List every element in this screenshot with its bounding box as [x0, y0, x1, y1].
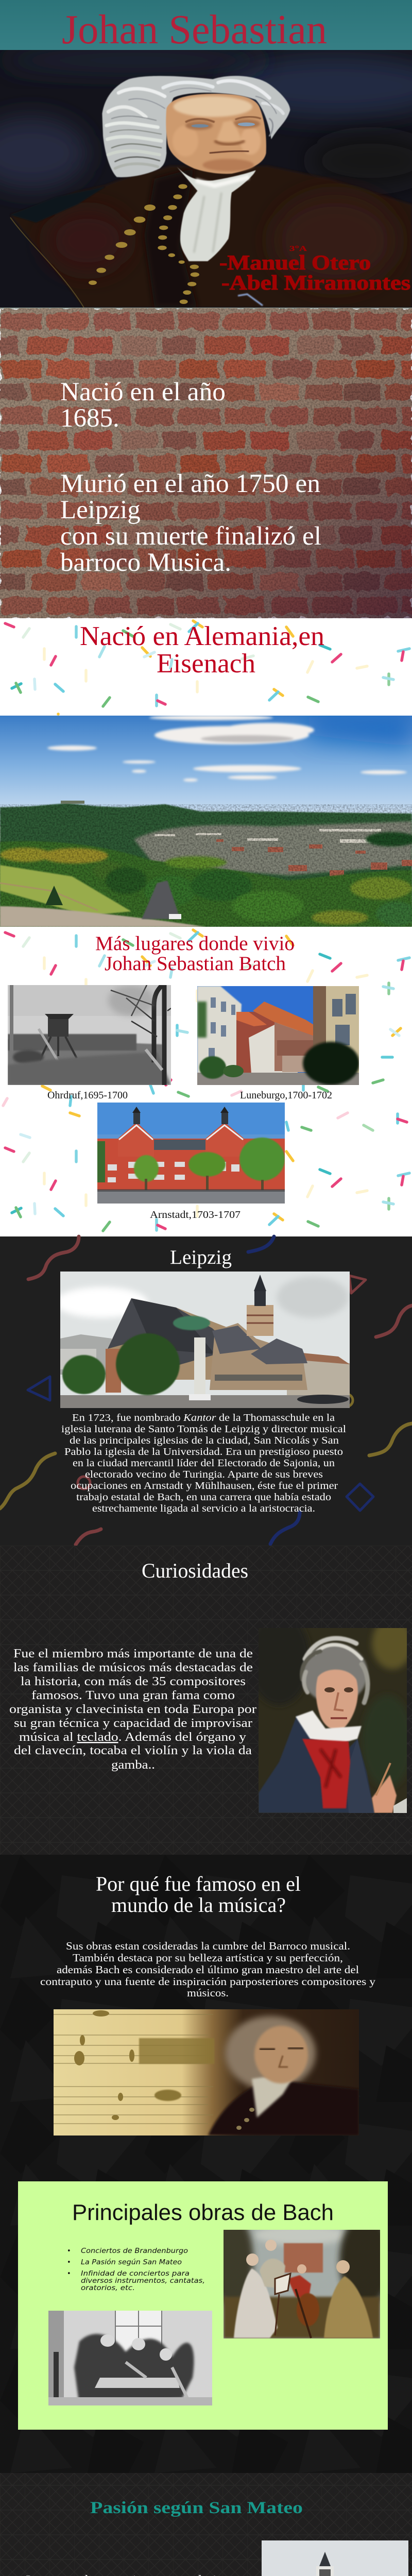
- heading: St Matthew Passion teal: Pasión según San Mateo: [90, 2499, 303, 2517]
- heading: birthplace: Eisenach: [157, 649, 255, 679]
- panel: portrait of Bach: [0, 50, 412, 308]
- text: why famous body: [40, 1940, 376, 1999]
- text: Leipzig description: electorado vecino de Turingia. Aparte de sus breves: [85, 1469, 323, 1480]
- text: Leipzig description: Pablo la iglesia de la Universidad. Era un prestigioso puesto: [64, 1446, 343, 1458]
- text: class and authors: 3°A: [289, 245, 307, 253]
- heading: other places: [95, 933, 295, 975]
- panel: white confetti background: [0, 618, 412, 1239]
- captions: Ohrdruf and Luneburgo: Ohrdruf,1695-1700: [47, 1090, 128, 1101]
- text: class and authors: -Manuel Otero: [219, 251, 371, 274]
- text: why famous body: También destaca por su belleza artística y su perfección,: [73, 1952, 343, 1964]
- image: Eisenach landscape: [0, 716, 412, 927]
- text: Curiosidades body: famosos. Tuvo una gran fama como: [31, 1689, 235, 1702]
- image: St Thomas church: [262, 2540, 408, 2576]
- image: family music painting: [224, 2230, 380, 2338]
- heading: why famous: mundo de la música?: [111, 1893, 286, 1917]
- list: works: La Pasión según San Mateo: [81, 2259, 182, 2266]
- face: [166, 94, 266, 174]
- heading: Leipzig: Leipzig: [170, 1246, 232, 1268]
- heading: other places: Más lugares donde vivio: [95, 933, 295, 955]
- text: birth: [60, 378, 226, 433]
- list: works: •: [67, 2247, 71, 2255]
- text: Curiosidades body: música al teclado . Además del órgano y: [19, 1731, 246, 1744]
- text: why famous body: músicos.: [187, 1987, 229, 1999]
- list: works: •: [67, 2270, 71, 2278]
- text: Curiosidades body: las familias de músicos más destacadas de: [13, 1661, 253, 1674]
- image: Arnstadt: [97, 1103, 285, 1204]
- text: Leipzig description: de las principales iglesias de la ciudad, San Nicolás y San: [70, 1435, 339, 1446]
- text: death: Murió en el año 1750 en: [60, 469, 320, 498]
- panel: brick wall: [0, 308, 412, 618]
- text: why famous body: contraputo y una fuente de inspiración parposteriores compositores y: [40, 1975, 376, 1988]
- text: Curiosidades body: su gran técnica y capacidad de improvisar: [14, 1717, 252, 1730]
- image: composer portrait: [259, 1628, 407, 1813]
- wig: [102, 76, 290, 177]
- list: works: Conciertos de Brandenburgo: [81, 2247, 188, 2255]
- text: death: con su muerte finalizó el: [60, 522, 321, 551]
- panel: why famous background: [0, 1855, 412, 2473]
- captions: Ohrdruf and Luneburgo: Luneburgo,1700-1702: [240, 1090, 332, 1101]
- list: works: [67, 2247, 205, 2292]
- heading: why famous: Por qué fue famoso en el: [96, 1872, 301, 1895]
- text: Curiosidades body: Fue el miembro más importante de una de: [13, 1647, 253, 1660]
- text: class and authors: [219, 245, 410, 294]
- caption: Arnstadt: Arnstadt,1703-1707: [150, 1209, 241, 1221]
- text: Curiosidades body: gamba..: [111, 1758, 155, 1772]
- image: Luneburgo: [197, 986, 359, 1085]
- heading: birthplace: [80, 621, 324, 679]
- panel: Leipzig background: [0, 1236, 412, 1546]
- heading: other places: Johan Sebastian Batch: [105, 953, 286, 975]
- text: birth: Nació en el año: [60, 378, 226, 406]
- text: Leipzig description: trabajo estatal de Bach, en una carrera que había estado: [76, 1492, 331, 1503]
- text: death: [60, 469, 321, 577]
- title: Johan Sebastian: [62, 7, 327, 53]
- heading: principal works: Principales obras de Bach: [72, 2200, 334, 2225]
- heading: Curiosidades: Curiosidades: [142, 1559, 248, 1582]
- list: works: diversos instrumentos, cantatas,: [81, 2277, 205, 2285]
- panel: Curiosidades background: [0, 1546, 412, 1855]
- text: Curiosidades body: organista y clavecinista en toda Europa por: [9, 1703, 256, 1716]
- buttons: [89, 184, 199, 304]
- text: Leipzig description: estrechamente ligada al servicio a la aristocracia.: [92, 1503, 315, 1514]
- text: Leipzig description: [61, 1412, 346, 1514]
- text: Leipzig description: En 1723, fue nombrado Kantor de la Thomasschule en la: [72, 1412, 335, 1423]
- list: works: Infinidad de conciertos para: [81, 2270, 190, 2278]
- text: Curiosidades body: la historia, con más de 35 compositores: [21, 1675, 246, 1688]
- text: class and authors: -Abel Miramontes: [221, 271, 410, 294]
- image: Leipzig church: [60, 1272, 350, 1408]
- text: why famous body: Sus obras estan cosideradas la cumbre del Barroco musical.: [66, 1940, 350, 1952]
- list: works: oratorios, etc.: [81, 2284, 135, 2292]
- text: Leipzig description: en la ciudad mercantil líder del Electorado de Sajonia, un: [73, 1458, 335, 1469]
- image: Ohrdruf: [8, 985, 171, 1085]
- text: why famous body: además Bach es considerado el último gran maestro del arte del: [57, 1963, 359, 1976]
- heading: why famous: [96, 1872, 301, 1917]
- text: Curiosidades body: [9, 1647, 256, 1772]
- list: works: •: [67, 2259, 71, 2266]
- text: Leipzig description: iglesia luterana de Santo Tomás de Leipzig y director musical: [61, 1423, 346, 1435]
- text: birth: 1685.: [60, 404, 119, 433]
- panel: principal works: [18, 2181, 391, 2430]
- image: score and Bach portrait: [54, 2009, 359, 2136]
- heading: birthplace: Nació en Alemania,en: [80, 621, 324, 651]
- text: Leipzig description: ocupaciones en Arnstadt y Mühlhausen, éste fue el primer: [71, 1480, 338, 1492]
- cravat: [177, 167, 256, 261]
- title band: [0, 0, 412, 53]
- captions: Ohrdruf and Luneburgo: [47, 1090, 332, 1101]
- text: death: barroco Musica.: [60, 548, 231, 577]
- image: engraving of musicians: [48, 2311, 212, 2405]
- text: Curiosidades body: del clavecín, tocaba el violín y la viola da: [14, 1744, 252, 1757]
- text: death: Leipzig: [60, 496, 141, 524]
- panel: lower dark background: [0, 2473, 412, 2576]
